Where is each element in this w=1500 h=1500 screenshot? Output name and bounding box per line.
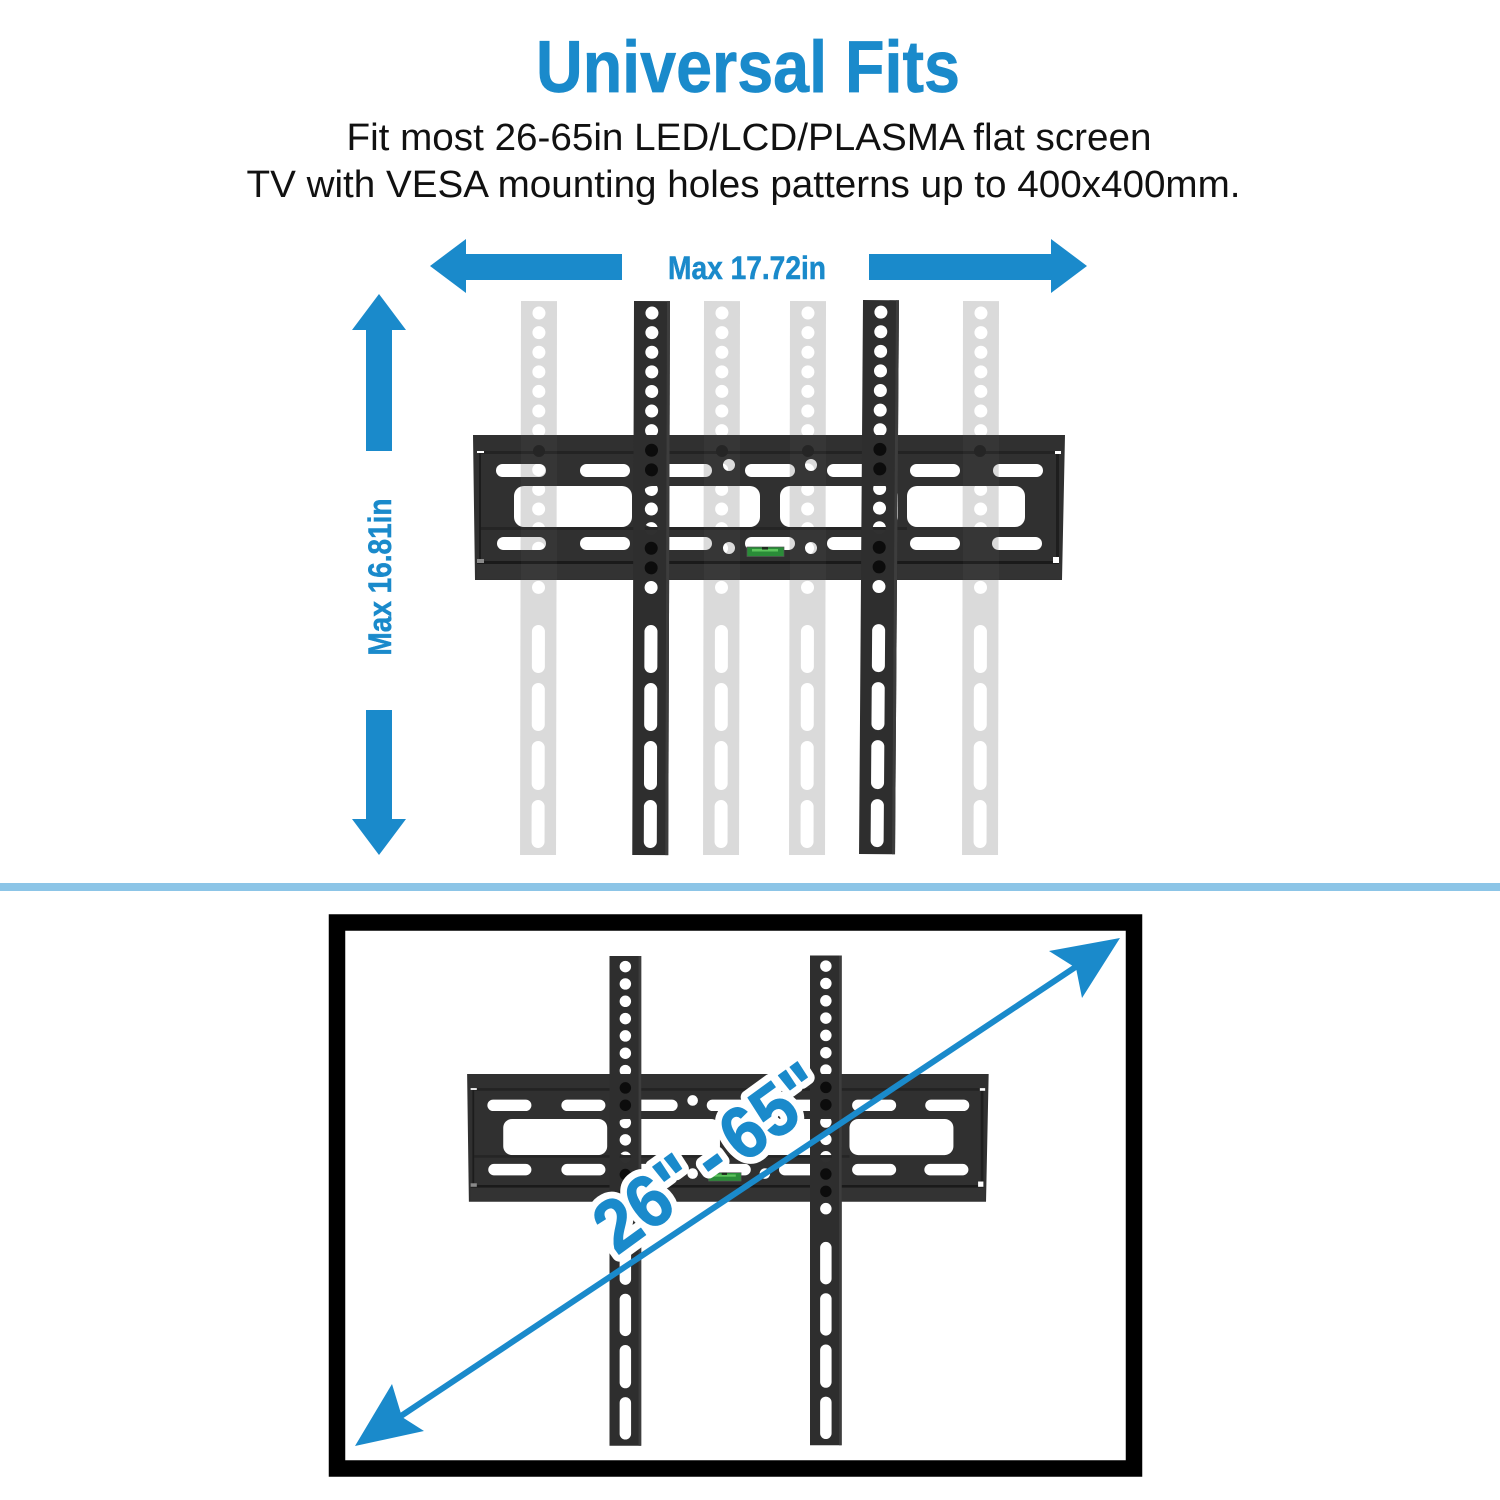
title: Universal Fits <box>536 27 960 108</box>
subtitle <box>246 117 1240 206</box>
wall mount bracket, top view <box>473 300 1065 855</box>
mounting plate <box>473 435 1065 580</box>
ghost strip tint over plate <box>521 435 999 580</box>
arrow: right <box>869 239 1087 293</box>
arrowhead: lower left <box>355 1384 424 1446</box>
subtitle: TV with VESA mounting holes patterns up to 400x400mm. <box>246 164 1240 206</box>
TV screen frame <box>337 922 1134 1468</box>
wall mount bracket inside TV <box>467 956 989 1446</box>
diagonal size label: 26" - 65" <box>578 1047 841 1269</box>
subtitle: Fit most 26-65in LED/LCD/PLASMA flat screen <box>346 117 1152 159</box>
left mounting strip <box>610 956 641 1446</box>
arrow: left <box>430 239 622 293</box>
divider line <box>0 883 1500 891</box>
right mounting strip <box>810 956 842 1445</box>
width label: Max 17.72in <box>668 250 826 286</box>
mounting plate <box>467 1074 989 1202</box>
height dimension: Max 16.81in <box>352 294 406 855</box>
diagonal double arrow <box>355 938 1120 1446</box>
diagonal size label: 26" - 65" <box>578 1047 841 1269</box>
height label: Max 16.81in <box>362 498 398 656</box>
left mounting strip <box>632 301 670 855</box>
arrow: up <box>352 294 406 451</box>
right mounting strip <box>859 300 899 854</box>
arrowhead: upper right <box>1049 938 1120 998</box>
ghost positions of mounting strips <box>520 301 999 855</box>
width dimension: Max 17.72in <box>430 239 1087 293</box>
arrow: down <box>352 710 406 855</box>
